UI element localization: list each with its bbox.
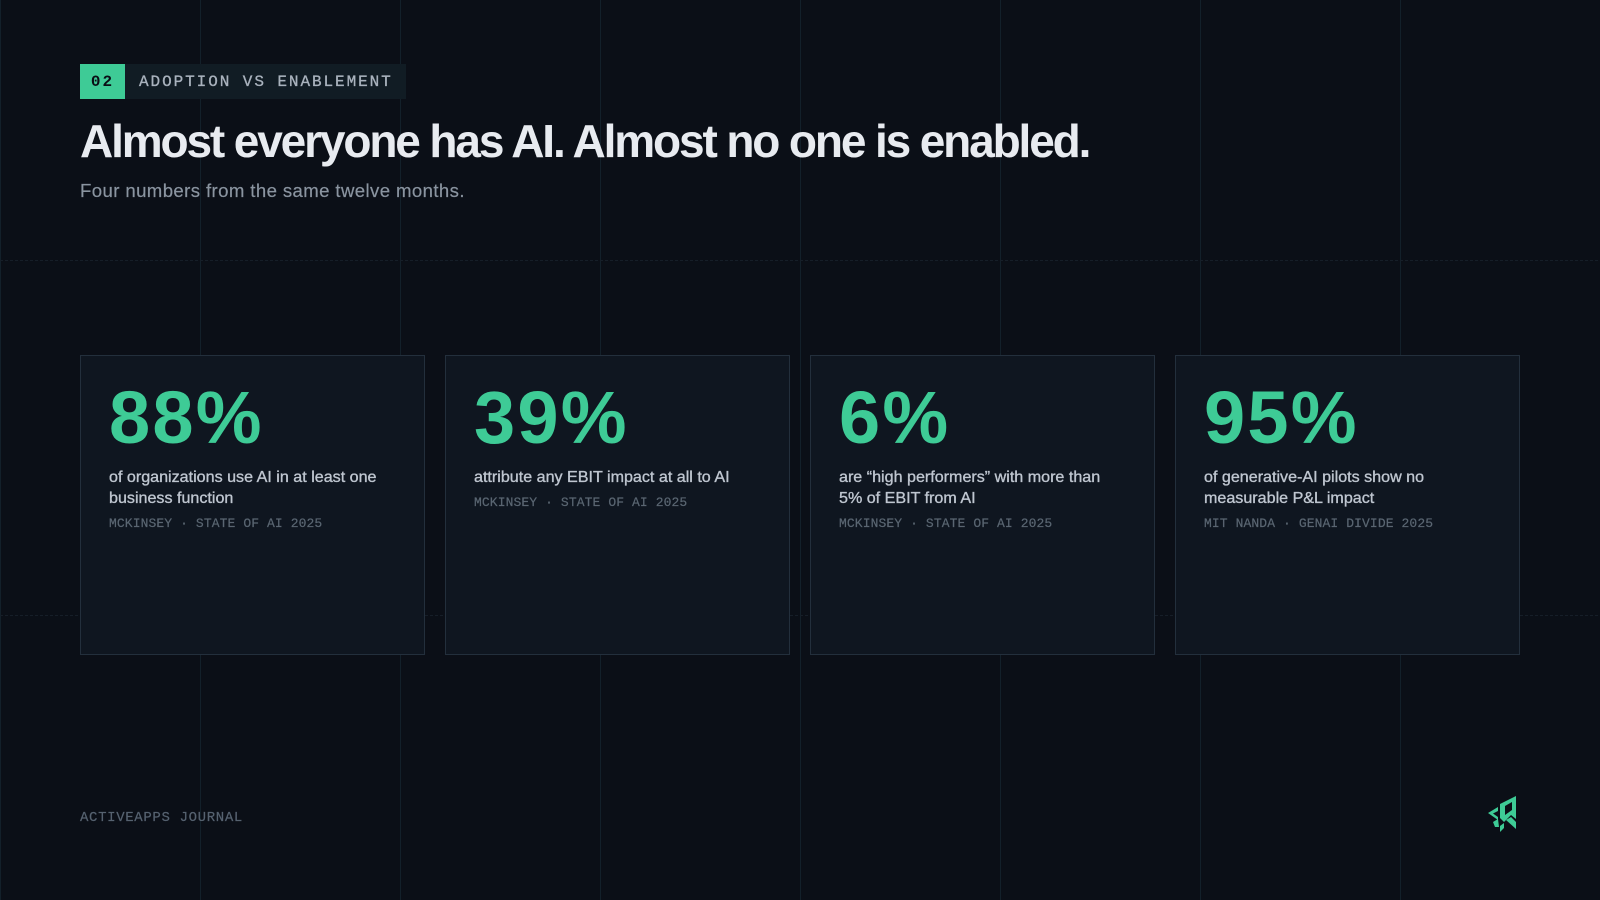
title: Almost everyone has AI. Almost no one is enabled.: [80, 115, 1089, 167]
section label: ADOPTION VS ENABLEMENT: [139, 73, 393, 91]
stat source: MIT NANDA · GENAI DIVIDE 2025: [1204, 516, 1433, 531]
stat number: 6%: [839, 376, 950, 459]
stat description: business function: [109, 489, 233, 507]
stat description: of organizations use AI in at least one: [109, 468, 377, 486]
stat description: [1204, 468, 1424, 507]
footer label: ACTIVEAPPS JOURNAL: [80, 810, 243, 826]
section tag: [80, 64, 406, 99]
panel: stat 95%: [1175, 355, 1520, 655]
stat description: measurable P&L impact: [1204, 489, 1374, 507]
subtitle: Four numbers from the same twelve months.: [80, 180, 465, 201]
section number: [80, 64, 125, 99]
section number: 02: [91, 73, 114, 91]
stat source: MCKINSEY · STATE OF AI 2025: [109, 516, 322, 531]
stat source: MCKINSEY · STATE OF AI 2025: [839, 516, 1052, 531]
stat description: [109, 468, 377, 507]
panel: stat 39%: [445, 355, 790, 655]
stat number: 88%: [109, 376, 264, 459]
panel: stat 6%: [810, 355, 1155, 655]
stat number: 95%: [1204, 376, 1359, 459]
stat number: 39%: [474, 376, 629, 459]
stat description: 5% of EBIT from AI: [839, 489, 976, 507]
icon: logo: [1488, 796, 1516, 832]
stat description: attribute any EBIT impact at all to AI: [474, 468, 730, 486]
stat source: MCKINSEY · STATE OF AI 2025: [474, 495, 687, 510]
stat description: [839, 468, 1100, 507]
panel: stat 88%: [80, 355, 425, 655]
stat description: are “high performers” with more than: [839, 468, 1100, 486]
stat description: of generative-AI pilots show no: [1204, 468, 1424, 486]
